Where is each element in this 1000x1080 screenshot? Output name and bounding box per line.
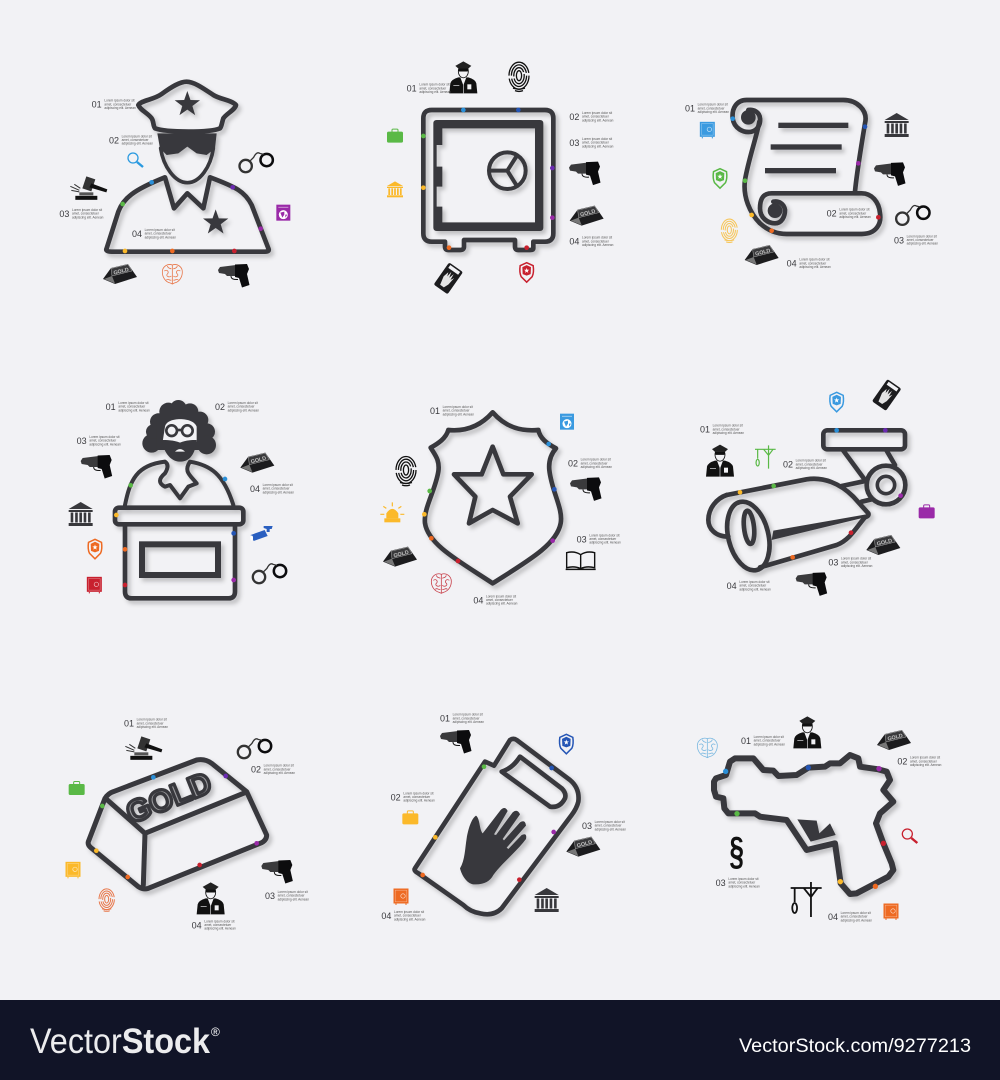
label 02: amet, consectetuer — [264, 767, 291, 771]
label 04: Lorem ipsum dolor sit — [145, 228, 175, 232]
coloured dots on outline — [120, 180, 263, 253]
label 02: 02 — [827, 209, 837, 219]
label 03: 03 — [828, 558, 838, 568]
footer logo: VectorStock — [30, 1022, 210, 1061]
label 02: Lorem ipsum dolor sit — [582, 111, 612, 115]
label 02: 02 — [391, 792, 401, 802]
label 02 — [391, 791, 435, 803]
label 01: 01 — [685, 104, 695, 114]
icon: police officer — [793, 716, 821, 748]
label 04 — [381, 910, 426, 921]
label 03: Lorem ipsum dolor sit — [728, 877, 759, 881]
icon: gold bar — [103, 264, 137, 284]
label 01: amet, consectetuer — [698, 106, 725, 110]
label 03: 03 — [716, 878, 726, 888]
icon: pistol — [81, 455, 112, 478]
label 03: amet, consectetuer — [841, 560, 868, 564]
label 02: Lorem ipsum dolor sit — [228, 401, 258, 405]
icon: pistol — [796, 572, 827, 596]
label 01: amet, consectetuer — [453, 716, 480, 720]
label 01: adipiscing elit. Aenean — [137, 725, 168, 729]
label 03 — [59, 208, 104, 219]
label 03: Lorem ipsum dolor sit — [89, 435, 120, 439]
icon: gavel — [125, 736, 162, 760]
label 03: amet, consectetuer — [72, 212, 99, 216]
label 04: amet, consectetuer — [145, 232, 172, 236]
label 01: Lorem ipsum dolor sit — [443, 405, 473, 409]
label 01 — [685, 103, 729, 114]
label 03: Lorem ipsum dolor sit — [595, 820, 625, 824]
label 01: Lorem ipsum dolor sit — [453, 713, 483, 717]
label 03 — [569, 137, 614, 148]
icon: hand folder — [872, 379, 901, 411]
label 04: adipiscing elit. Aenean — [394, 917, 426, 921]
outline: officer figure — [106, 82, 269, 252]
label 04: adipiscing elit. Aenean — [145, 235, 176, 239]
label 01 — [92, 99, 136, 110]
icon: briefcase — [387, 129, 403, 143]
icon: magnifier — [902, 829, 917, 843]
label 03: amet, consectetuer — [278, 894, 305, 898]
label 03: amet, consectetuer — [907, 238, 934, 242]
label 01: amet, consectetuer — [419, 86, 446, 90]
label 01: 01 — [741, 736, 751, 746]
label 02: Lorem ipsum dolor sit — [122, 134, 152, 138]
outline: gold bar: GOLD — [121, 766, 216, 830]
label 01 — [106, 401, 150, 412]
icon: shield — [830, 392, 843, 412]
label 01 — [741, 735, 785, 746]
label 03: adipiscing elit. Aenean — [595, 827, 626, 831]
outline: pistol — [714, 755, 893, 894]
label 03: amet, consectetuer — [589, 537, 616, 541]
label 03: 03 — [577, 534, 587, 544]
label 04: Lorem ipsum dolor sit — [204, 919, 235, 923]
label 02: 02 — [897, 757, 907, 767]
icon: handcuffs — [896, 205, 930, 225]
label 04: 04 — [192, 920, 202, 930]
icon: safe — [700, 122, 715, 138]
icon: courthouse — [535, 888, 559, 912]
label 04 — [828, 911, 872, 922]
icon: courthouse — [69, 502, 93, 526]
label 02 — [568, 458, 612, 469]
label 03 — [265, 890, 309, 901]
label 02: amet, consectetuer — [582, 115, 609, 119]
label 04: Lorem ipsum dolor sit — [739, 580, 770, 584]
label 02: amet, consectetuer — [796, 462, 823, 466]
outline: security camera — [708, 430, 905, 575]
icon: fingerprint — [396, 456, 416, 486]
label 01: amet, consectetuer — [104, 102, 131, 106]
panel: police officer — [59, 82, 290, 287]
label 04: amet, consectetuer — [486, 598, 513, 602]
label 04 — [192, 919, 236, 931]
label 02: Lorem ipsum dolor sit — [839, 208, 870, 212]
icon: fingerprint — [99, 889, 114, 911]
outline: judge at podium — [115, 400, 243, 598]
icon: gold bar — [240, 453, 274, 473]
icon: globe book — [276, 205, 290, 221]
label 01: 01 — [430, 406, 440, 416]
label 04: amet, consectetuer — [582, 239, 609, 243]
label 04: adipiscing elit. Aenean — [486, 602, 518, 606]
label 02: Lorem ipsum dolor sit — [264, 764, 294, 768]
coloured dots on outline — [421, 108, 555, 250]
label 04: 04 — [381, 911, 391, 921]
label 04: amet, consectetuer — [799, 261, 826, 265]
outline: scroll — [733, 100, 880, 234]
label 01: adipiscing elit. Aenean — [713, 431, 744, 435]
label 03: adipiscing elit. Aenean — [907, 242, 938, 246]
label 02: adipiscing elit. Aenean — [228, 408, 259, 412]
coloured dots on outline — [730, 116, 881, 233]
coloured dots on outline — [723, 765, 886, 889]
icon: pistol — [570, 477, 601, 501]
label 03 — [894, 234, 938, 246]
label 01: amet, consectetuer — [754, 739, 781, 743]
icon: police officer — [449, 61, 477, 93]
label 04: Lorem ipsum dolor sit — [486, 594, 516, 598]
label 01 — [407, 83, 451, 94]
icon: pistol — [218, 264, 249, 287]
panel: hand folder — [381, 713, 626, 921]
label 02: adipiscing elit. Aenean — [839, 215, 871, 219]
outline: folder with hand — [415, 739, 579, 914]
label 04: adipiscing elit. Aenean — [582, 243, 614, 247]
panel: badge — [380, 405, 621, 606]
label 02: 02 — [215, 402, 225, 412]
label 01: Lorem ipsum dolor sit — [754, 735, 784, 739]
label 02: 02 — [569, 112, 579, 122]
label 01: 01 — [92, 100, 102, 110]
label 04: 04 — [828, 912, 838, 922]
label 02: 02 — [109, 135, 119, 145]
icon: fingerprint — [509, 62, 529, 91]
label 02: Lorem ipsum dolor sit — [403, 791, 434, 795]
label 04: 04 — [132, 229, 142, 239]
label 01: 01 — [440, 714, 450, 724]
label 03: adipiscing elit. Aenean — [72, 215, 104, 219]
icon: gold bar — [570, 206, 604, 226]
icon: police officer — [197, 882, 225, 914]
label 02: adipiscing elit. Aenean — [403, 799, 435, 803]
icon: brain — [162, 264, 182, 284]
panel: pistol — [697, 716, 942, 922]
label 02: adipiscing elit. Aenean — [796, 466, 827, 470]
icon: shield — [520, 263, 533, 282]
icon: gold bar — [877, 730, 911, 750]
panel: scroll — [685, 100, 938, 269]
label 02: Lorem ipsum dolor sit — [910, 756, 940, 760]
label 02: Lorem ipsum dolor sit — [796, 459, 826, 463]
icon: handcuffs — [239, 153, 273, 172]
outline: safe — [423, 110, 553, 250]
label 01: adipiscing elit. Aenean — [453, 720, 484, 724]
label 02: 02 — [783, 460, 793, 470]
label 03: 03 — [582, 821, 592, 831]
label 04: amet, consectetuer — [394, 914, 421, 918]
coloured dots on outline — [114, 477, 236, 587]
outline: police badge — [425, 412, 561, 583]
label 03: adipiscing elit. Aenean — [728, 884, 760, 888]
icon: courthouse — [387, 181, 403, 197]
label 02: adipiscing elit. Aenean — [122, 142, 153, 146]
label 01: 01 — [407, 84, 417, 94]
label 04: 04 — [787, 259, 797, 269]
label 02 — [827, 208, 871, 219]
icon: safe — [393, 888, 408, 905]
label 01 — [124, 718, 168, 729]
icon: briefcase — [919, 505, 935, 518]
label 01: adipiscing elit. Aenean — [419, 90, 451, 94]
icon: globe book — [560, 414, 574, 430]
outline: gold bar — [88, 760, 267, 889]
label 04: adipiscing elit. Aenean — [739, 587, 771, 591]
label 02: 02 — [251, 765, 261, 775]
label 02: adipiscing elit. Aenean — [910, 763, 942, 767]
label 01: amet, consectetuer — [118, 405, 145, 409]
icon: gold bar — [566, 837, 600, 857]
label 04 — [250, 483, 294, 494]
label 02 — [109, 134, 153, 146]
icon: pistol — [261, 860, 293, 883]
label 04 — [727, 580, 771, 591]
label 03: adipiscing elit. Aenean — [589, 541, 621, 545]
label 02 — [783, 459, 827, 470]
icon: section sign: § — [729, 829, 744, 874]
label 01: 01 — [106, 402, 116, 412]
label 01 — [700, 424, 744, 435]
coloured dots on outline — [738, 428, 903, 560]
label 02 — [251, 764, 295, 775]
icon: briefcase — [402, 811, 418, 824]
label 02: amet, consectetuer — [839, 211, 866, 215]
label 04: 04 — [473, 595, 483, 605]
label 04: adipiscing elit. Aenean — [799, 265, 831, 269]
label 03 — [828, 557, 873, 568]
icon: courthouse — [885, 113, 909, 137]
label 03: adipiscing elit. Aenean — [89, 442, 121, 446]
label 01: adipiscing elit. Aenean — [104, 106, 136, 110]
label 03: Lorem ipsum dolor sit — [582, 137, 612, 141]
label 01: Lorem ipsum dolor sit — [698, 103, 728, 107]
label 04: adipiscing elit. Aenean — [841, 918, 872, 922]
label 03: Lorem ipsum dolor sit — [589, 533, 620, 537]
panel: safe — [387, 61, 614, 294]
panel: gold bar — [65, 718, 309, 931]
label 03: amet, consectetuer — [582, 141, 609, 145]
label 01: amet, consectetuer — [137, 721, 164, 725]
footer registered mark: ® — [211, 1025, 220, 1039]
label 02: amet, consectetuer — [581, 461, 608, 465]
label 01: 01 — [124, 719, 134, 729]
label 02 — [215, 401, 259, 412]
label 04: Lorem ipsum dolor sit — [799, 258, 830, 262]
icon: pistol — [874, 162, 905, 186]
label 03: 03 — [59, 209, 69, 219]
icon: shield — [88, 539, 102, 559]
icon: siren — [380, 502, 404, 522]
label 04 — [787, 258, 831, 269]
label 01 — [430, 405, 474, 416]
label 01: adipiscing elit. Aenean — [443, 412, 474, 416]
label 03: adipiscing elit. Aenean — [582, 144, 614, 148]
label 04: Lorem ipsum dolor sit — [582, 236, 612, 240]
footer image url: VectorStock.com/9277213 — [739, 1036, 971, 1057]
icon: open book — [566, 552, 596, 570]
panel: security camera — [700, 379, 935, 596]
label 04: adipiscing elit. Aenean — [204, 927, 236, 931]
label 03: Lorem ipsum dolor sit — [72, 208, 102, 212]
label 03 — [716, 877, 760, 888]
coloured dots on outline — [420, 764, 556, 882]
icon: handcuffs — [253, 564, 286, 583]
icon: fingerprint — [721, 219, 737, 242]
icon: gold bar — [383, 547, 417, 567]
label 04: amet, consectetuer — [204, 923, 231, 927]
label 01: amet, consectetuer — [443, 409, 470, 413]
label 01: Lorem ipsum dolor sit — [419, 83, 450, 87]
icon: gallows — [791, 882, 822, 917]
label 03: adipiscing elit. Aenean — [841, 564, 873, 568]
label 01: adipiscing elit. Aenean — [754, 742, 785, 746]
icon: magnifier — [128, 153, 143, 167]
label 03: amet, consectetuer — [89, 439, 116, 443]
label 04: amet, consectetuer — [263, 487, 290, 491]
label 02: Lorem ipsum dolor sit — [581, 458, 611, 462]
label 01: amet, consectetuer — [713, 427, 740, 431]
label 02: adipiscing elit. Aenean — [582, 118, 614, 122]
icon: security camera — [250, 526, 273, 541]
label 02: 02 — [568, 459, 578, 469]
label 02: amet, consectetuer — [403, 795, 430, 799]
label 04: 04 — [727, 581, 737, 591]
icon: police officer — [706, 445, 734, 477]
label 01: Lorem ipsum dolor sit — [104, 99, 135, 103]
label 04: adipiscing elit. Aenean — [263, 490, 294, 494]
icon: safe — [883, 903, 898, 920]
icon: gold bar — [745, 245, 779, 265]
label 01: adipiscing elit. Aenean — [698, 110, 729, 114]
label 02: adipiscing elit. Aenean — [264, 771, 295, 775]
label 04 — [132, 228, 176, 239]
icon: handcuffs — [238, 739, 271, 758]
icon: safe — [87, 577, 102, 593]
label 03: 03 — [894, 235, 904, 245]
icon: gold bar — [866, 535, 900, 555]
label 03 — [77, 435, 121, 446]
label 01: adipiscing elit. Aenean — [118, 408, 150, 412]
icon: gallows — [755, 445, 776, 469]
label 04: Lorem ipsum dolor sit — [394, 910, 424, 914]
footer bar — [0, 1000, 1000, 1080]
panel: judge — [69, 400, 294, 598]
label 03: amet, consectetuer — [728, 881, 755, 885]
label 03: 03 — [569, 138, 579, 148]
icon: gavel — [70, 176, 107, 200]
label 03: Lorem ipsum dolor sit — [841, 557, 871, 561]
icon: briefcase — [69, 781, 85, 795]
label 02: amet, consectetuer — [228, 405, 255, 409]
label 01: Lorem ipsum dolor sit — [137, 718, 167, 722]
label 04: Lorem ipsum dolor sit — [841, 911, 871, 915]
icon: shield — [713, 169, 727, 188]
icon: safe — [65, 862, 80, 878]
coloured dots on outline — [94, 774, 259, 879]
label 01: Lorem ipsum dolor sit — [118, 401, 149, 405]
icon: shield — [559, 734, 573, 754]
label 04: amet, consectetuer — [739, 584, 766, 588]
icon: pistol — [440, 730, 471, 753]
coloured dots on outline — [422, 442, 557, 563]
label 02 — [897, 756, 942, 767]
icon: brain — [431, 574, 451, 593]
label 04: 04 — [250, 484, 260, 494]
label 04 — [473, 594, 518, 606]
label 03: Lorem ipsum dolor sit — [278, 890, 308, 894]
label 03: 03 — [77, 436, 87, 446]
label 03 — [582, 820, 626, 831]
icon: brain — [697, 738, 717, 758]
label 02 — [569, 111, 614, 122]
label 04 — [569, 236, 614, 247]
label 04: Lorem ipsum dolor sit — [263, 483, 293, 487]
label 01: Lorem ipsum dolor sit — [713, 424, 743, 428]
label 01: 01 — [700, 425, 710, 435]
icon: pistol — [569, 162, 600, 185]
label 02: amet, consectetuer — [910, 759, 937, 763]
label 01 — [440, 713, 484, 724]
label 03: adipiscing elit. Aenean — [278, 897, 309, 901]
label 04: amet, consectetuer — [841, 915, 868, 919]
icon: hand folder — [434, 262, 463, 294]
label 04: 04 — [569, 237, 579, 247]
label 03 — [577, 533, 621, 545]
label 03: 03 — [265, 891, 275, 901]
label 02: amet, consectetuer — [122, 138, 149, 142]
label 03: Lorem ipsum dolor sit — [907, 234, 937, 238]
label 03: amet, consectetuer — [595, 824, 622, 828]
label 02: adipiscing elit. Aenean — [581, 465, 612, 469]
